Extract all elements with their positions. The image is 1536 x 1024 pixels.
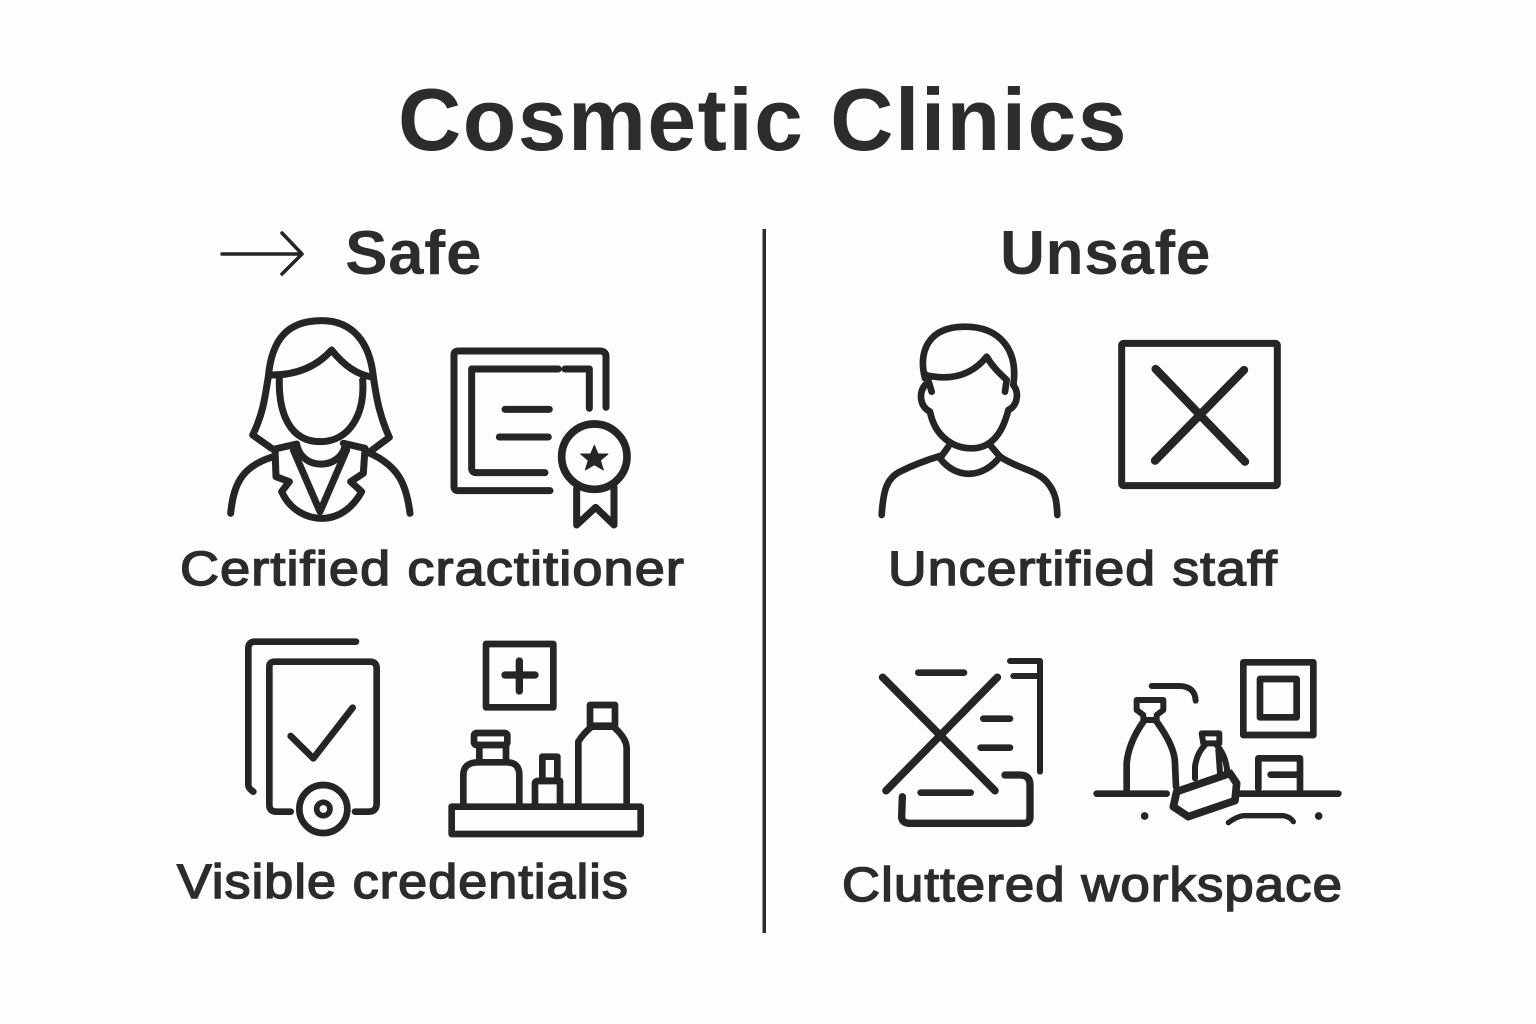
title: Cosmetic Clinics — [398, 70, 1128, 169]
label: certified practitioner: Certified cractitioner — [180, 543, 685, 596]
icon: uncertified man — [882, 327, 1057, 515]
label: visible credentials: Visible credentialis — [177, 856, 629, 909]
arrow — [222, 233, 302, 274]
panel: unsafe — [842, 219, 1343, 912]
icon: crossed box — [1122, 343, 1277, 486]
icon: crossed-out document — [883, 661, 1040, 823]
heading: unsafe: Unsafe — [1000, 219, 1211, 288]
label: cluttered workspace: Cluttered workspace — [842, 859, 1343, 912]
icon: tidy shelf with bottles — [452, 644, 641, 834]
heading: safe: Safe — [345, 219, 482, 288]
label: uncertified staff: Uncertified staff — [888, 543, 1278, 596]
icon: document with checkmark — [248, 642, 377, 833]
panel: safe — [177, 219, 685, 909]
icon: cluttered shelf — [1097, 662, 1338, 823]
icon: certificate with seal — [454, 351, 627, 525]
icon: certified woman — [231, 321, 410, 518]
